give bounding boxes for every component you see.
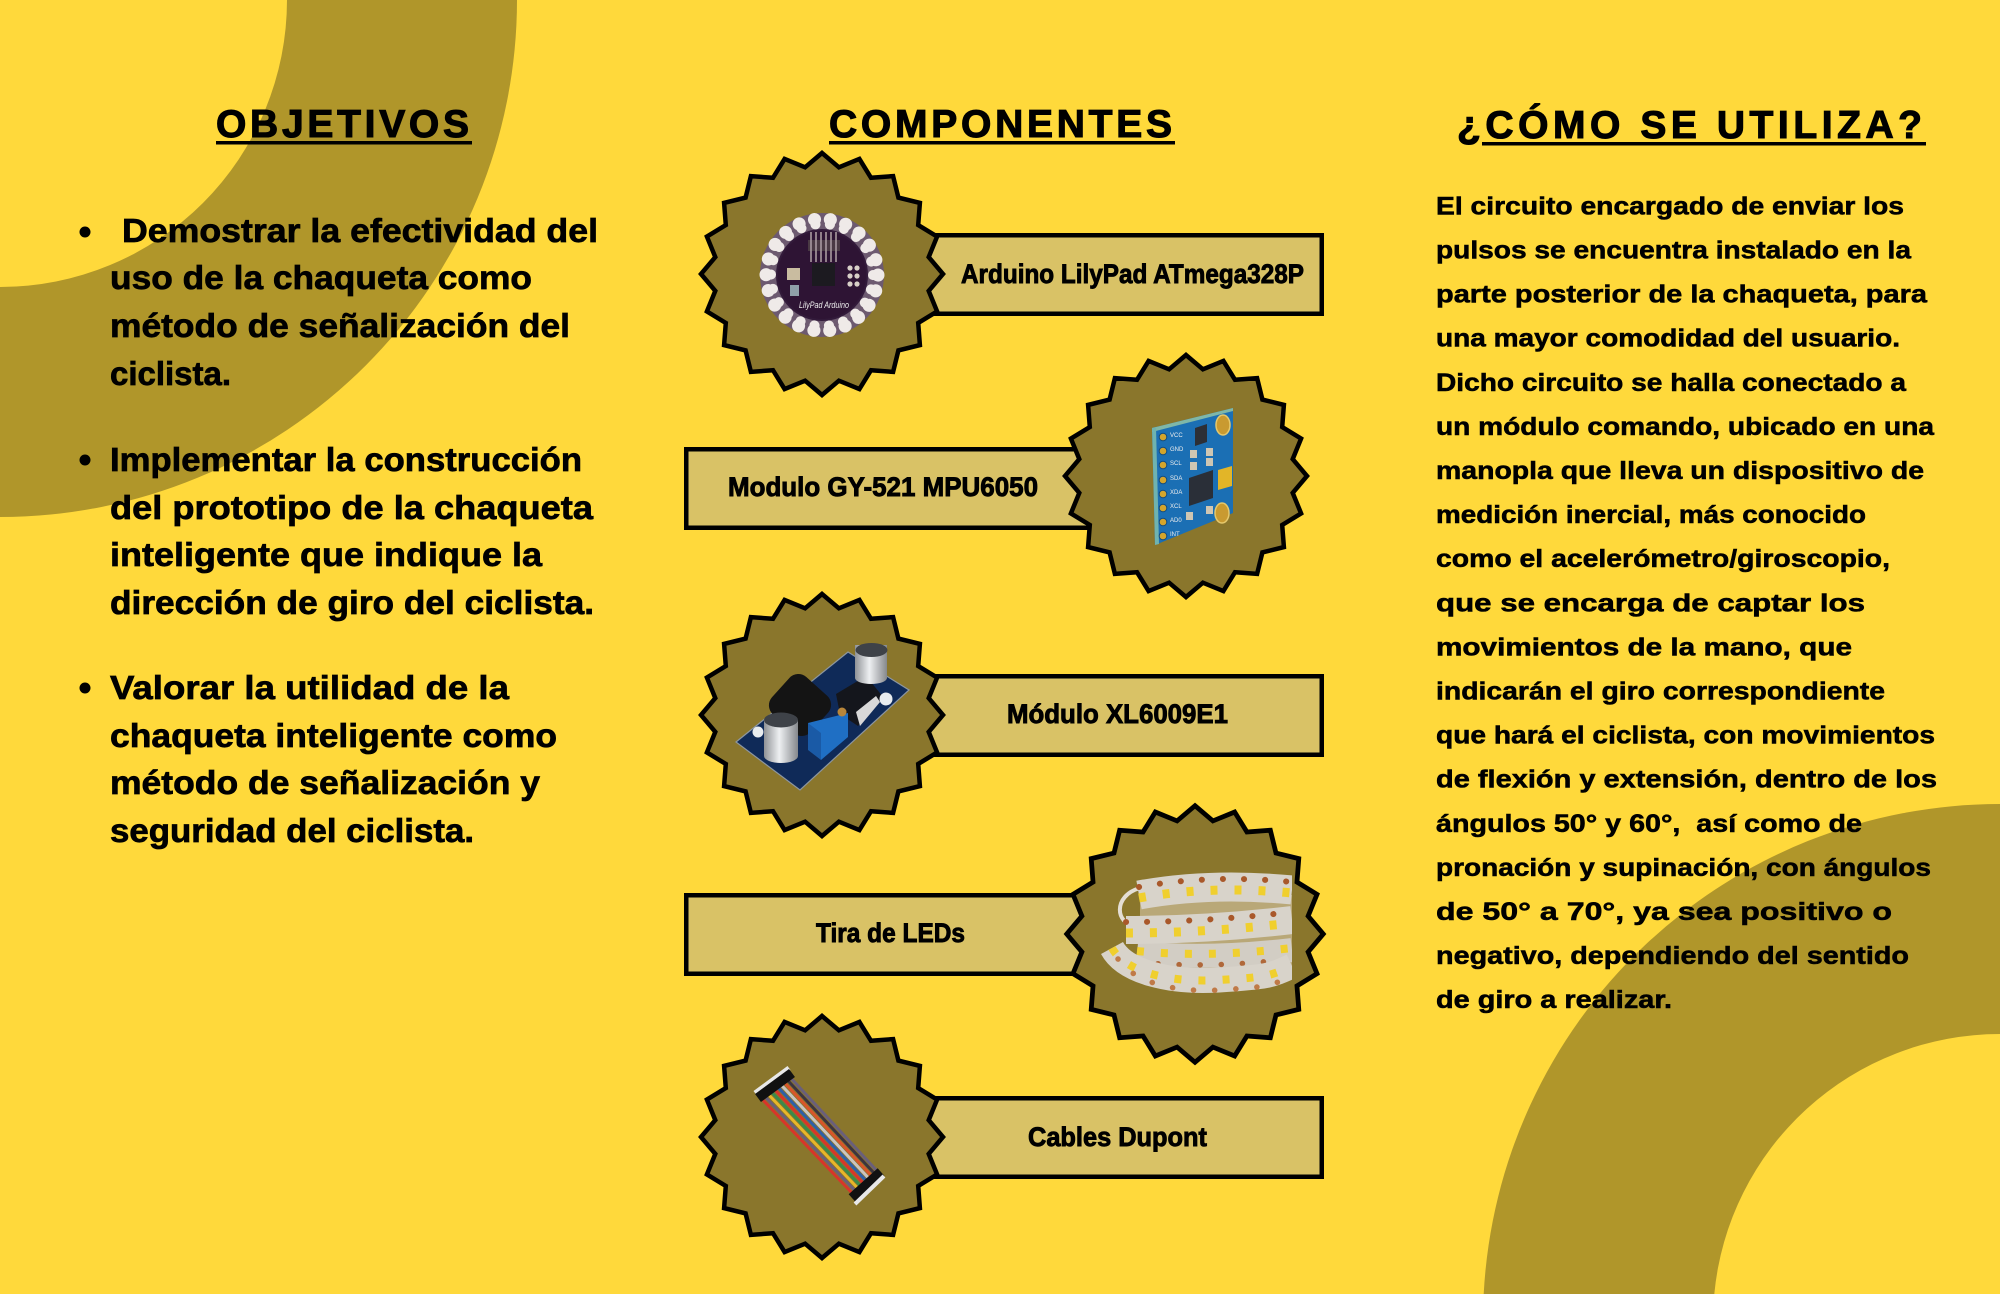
label: Cables Dupont	[900, 1098, 1322, 1177]
objective 2	[80, 441, 594, 621]
text block: explanation: El circuito encargado de enviar los	[1436, 192, 1904, 220]
icon: LED strip	[1112, 879, 1292, 990]
text block: explanation: ángulos 50° y 60°, así como de	[1436, 810, 1862, 838]
label: Modulo XL6009E1	[900, 676, 1322, 755]
text block: explanation: de giro a realizar.	[1436, 986, 1672, 1014]
objective 2: del prototipo de la chaqueta	[110, 489, 594, 526]
panel: como se utiliza	[1436, 103, 1937, 1014]
icon: MPU6050 board: INT	[1170, 532, 1180, 538]
objective 2: inteligente que indique la	[110, 536, 543, 573]
component: Tira de LEDs	[686, 806, 1323, 1062]
label: Tira de LEDs	[686, 895, 1136, 974]
objective 1: uso de la chaqueta como	[110, 259, 532, 296]
objective 3: seguridad del ciclista.	[110, 812, 474, 849]
icon: LilyPad board: LilyPad Arduino	[799, 300, 849, 310]
icon: MPU6050 board: AD0	[1170, 518, 1182, 524]
label: Modulo GY-521	[686, 449, 1136, 528]
objective 2: dirección de giro del ciclista.	[110, 584, 594, 621]
icon: LilyPad board	[760, 213, 884, 337]
objective 1: ciclista.	[110, 355, 231, 392]
component: Modulo XL6009E1	[701, 594, 1322, 836]
text block: explanation: pulsos se encuentra instalado en la	[1436, 237, 1912, 265]
decorative arc: top left	[0, 0, 517, 517]
text block: explanation: movimientos de la mano, que	[1436, 633, 1852, 661]
objective 3: método de señalización y	[110, 764, 541, 801]
text block: explanation: que se encarga de captar los	[1436, 589, 1865, 617]
heading: como se utiliza: ¿CÓMO SE UTILIZA?	[1457, 103, 1922, 147]
objective 3: Valorar la utilidad de la	[110, 669, 510, 706]
objective 1: Demostrar la efectividad del	[122, 212, 598, 249]
text block: explanation: manopla que lleva un dispositivo de	[1436, 457, 1924, 485]
heading: objetivos: OBJETIVOS	[216, 103, 469, 146]
icon: MPU6050 board: SDA	[1170, 476, 1182, 482]
component: Cables Dupont	[701, 1016, 1322, 1258]
objective 1	[80, 212, 598, 392]
panel: objetivos	[80, 103, 598, 849]
icon: MPU6050 board: SCL	[1170, 461, 1182, 467]
text block: explanation: como el acelerómetro/giroscopio,	[1436, 545, 1890, 573]
text block: explanation: que hará el ciclista, con movimientos	[1436, 722, 1935, 750]
icon: MPU6050 board: GND	[1170, 447, 1184, 453]
text block: explanation: parte posterior de la chaqueta, para	[1436, 281, 1928, 309]
objective 1: método de señalización del	[110, 307, 570, 344]
text block: explanation	[1436, 192, 1937, 1014]
decorative arc: bottom right	[1484, 804, 2000, 1294]
label: Arduino LilyPad	[900, 235, 1322, 314]
component: Modulo GY-521	[686, 355, 1307, 597]
icon: MPU6050 board: VCC	[1170, 433, 1183, 439]
label: Modulo GY-521: Modulo GY-521 MPU6050	[728, 472, 1038, 502]
starburst	[701, 1016, 943, 1258]
text block: explanation: de flexión y extensión, dentro de los	[1436, 766, 1937, 794]
label: Modulo XL6009E1: Módulo XL6009E1	[1007, 699, 1228, 729]
text block: explanation: medición inercial, más conocido	[1436, 501, 1866, 529]
heading: componentes: COMPONENTES	[829, 103, 1172, 146]
text block: explanation: indicarán el giro correspondiente	[1436, 677, 1885, 705]
text block: explanation: de 50° a 70°, ya sea positivo o	[1436, 898, 1892, 926]
starburst	[701, 594, 943, 836]
starburst	[1065, 355, 1307, 597]
objective 3	[80, 669, 557, 849]
icon: MPU6050 board: XDA	[1170, 490, 1182, 496]
icon: XL6009 board	[736, 643, 909, 790]
icon: MPU6050 board	[1152, 408, 1233, 545]
starburst	[701, 153, 943, 395]
text block: explanation: pronación y supinación, con ángulos	[1436, 854, 1931, 882]
text block: explanation: Dicho circuito se halla conectado a	[1436, 369, 1907, 397]
label: Tira de LEDs: Tira de LEDs	[816, 918, 965, 948]
text block: explanation: una mayor comodidad del usuario.	[1436, 325, 1900, 353]
objective 2: Implementar la construcción	[110, 441, 582, 478]
icon: Dupont cables	[755, 1068, 884, 1204]
text block: explanation: un módulo comando, ubicado en una	[1436, 413, 1935, 441]
icon: MPU6050 board: XCL	[1170, 504, 1182, 510]
component: Arduino LilyPad	[701, 153, 1322, 395]
label: Arduino LilyPad: Arduino LilyPad ATmega328P	[961, 259, 1304, 289]
label: Cables Dupont: Cables Dupont	[1028, 1122, 1207, 1152]
starburst	[1067, 806, 1323, 1062]
text block: explanation: negativo, dependiendo del sentido	[1436, 942, 1909, 970]
objective 3: chaqueta inteligente como	[110, 717, 557, 754]
